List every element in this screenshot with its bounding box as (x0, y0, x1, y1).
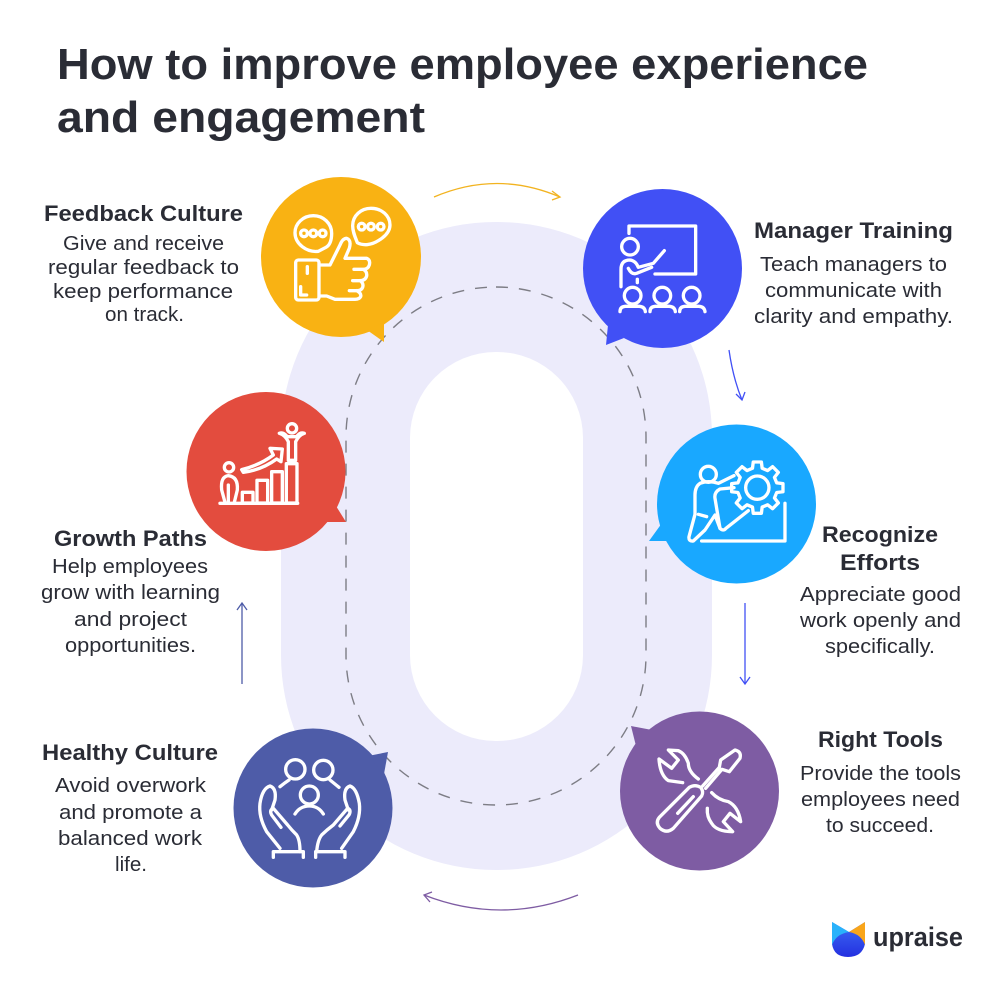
arrow: navy up (237, 603, 247, 684)
text: healthy culture: life. (115, 854, 147, 876)
text: feedback culture: regular feedback to (48, 257, 239, 279)
text: growth paths: opportunities. (65, 635, 196, 657)
text: healthy culture (42, 740, 218, 876)
text: growth paths: grow with learning (41, 582, 220, 604)
bubble: right tools (620, 712, 779, 870)
text: healthy culture: Healthy Culture (42, 740, 218, 765)
logo: upraise (832, 922, 963, 957)
text: feedback culture: Feedback Culture (44, 201, 243, 226)
text: manager training: clarity and empathy. (754, 306, 953, 328)
arrow: blue down (740, 603, 750, 684)
title: How to improve employee experience (57, 40, 868, 89)
text: right tools: Right Tools (818, 727, 943, 752)
text: manager training: Teach managers to (760, 254, 947, 276)
text: growth paths (41, 526, 220, 657)
icon: wrench and screwdriver (657, 750, 741, 832)
text: feedback culture: Give and receive (63, 233, 224, 255)
icon: growth chart with figures (220, 424, 304, 503)
bubble: healthy culture (234, 728, 392, 888)
arrow: purple bottom (424, 892, 578, 910)
text: feedback culture: on track. (105, 304, 184, 326)
text: recognize efforts: Efforts (840, 550, 920, 575)
bubble: feedback culture (261, 177, 421, 342)
text: growth paths: Help employees (52, 556, 208, 578)
text: recognize efforts: Recognize (822, 522, 938, 547)
bubble: growth paths (186, 392, 346, 551)
text: feedback culture (44, 201, 243, 326)
text: growth paths: Growth Paths (54, 526, 207, 551)
icon: thumbs up with speech bubbles (295, 208, 390, 300)
text: healthy culture: Avoid overwork (55, 775, 207, 797)
text: healthy culture: balanced work (58, 828, 203, 850)
text: recognize efforts (799, 522, 961, 658)
title (57, 40, 868, 142)
text: recognize efforts: Appreciate good (800, 584, 961, 606)
oval track (281, 222, 712, 870)
text: recognize efforts: specifically. (825, 636, 935, 658)
text: right tools: employees need (801, 789, 960, 811)
text: manager training: Manager Training (754, 218, 953, 243)
text: right tools: to succeed. (826, 815, 934, 837)
title: and engagement (57, 93, 425, 142)
text: growth paths: and project (74, 609, 187, 631)
bubble: manager training (583, 189, 742, 348)
icon: trainer at whiteboard (620, 226, 705, 312)
text: healthy culture: and promote a (59, 802, 203, 824)
text: right tools: Provide the tools (800, 763, 961, 785)
logo: upraise: upraise (873, 922, 963, 952)
arrow: yellow top (434, 184, 560, 200)
text: recognize efforts: work openly and (799, 610, 961, 632)
icon: people held in hands (260, 760, 360, 857)
text: right tools (800, 727, 961, 837)
bubble: recognize efforts (649, 424, 816, 584)
text: manager training (754, 218, 953, 328)
text: feedback culture: keep performance (53, 281, 233, 303)
icon: person pushing gear uphill (689, 462, 785, 541)
arrow: blue right curve (729, 350, 745, 400)
text: manager training: communicate with (765, 280, 942, 302)
